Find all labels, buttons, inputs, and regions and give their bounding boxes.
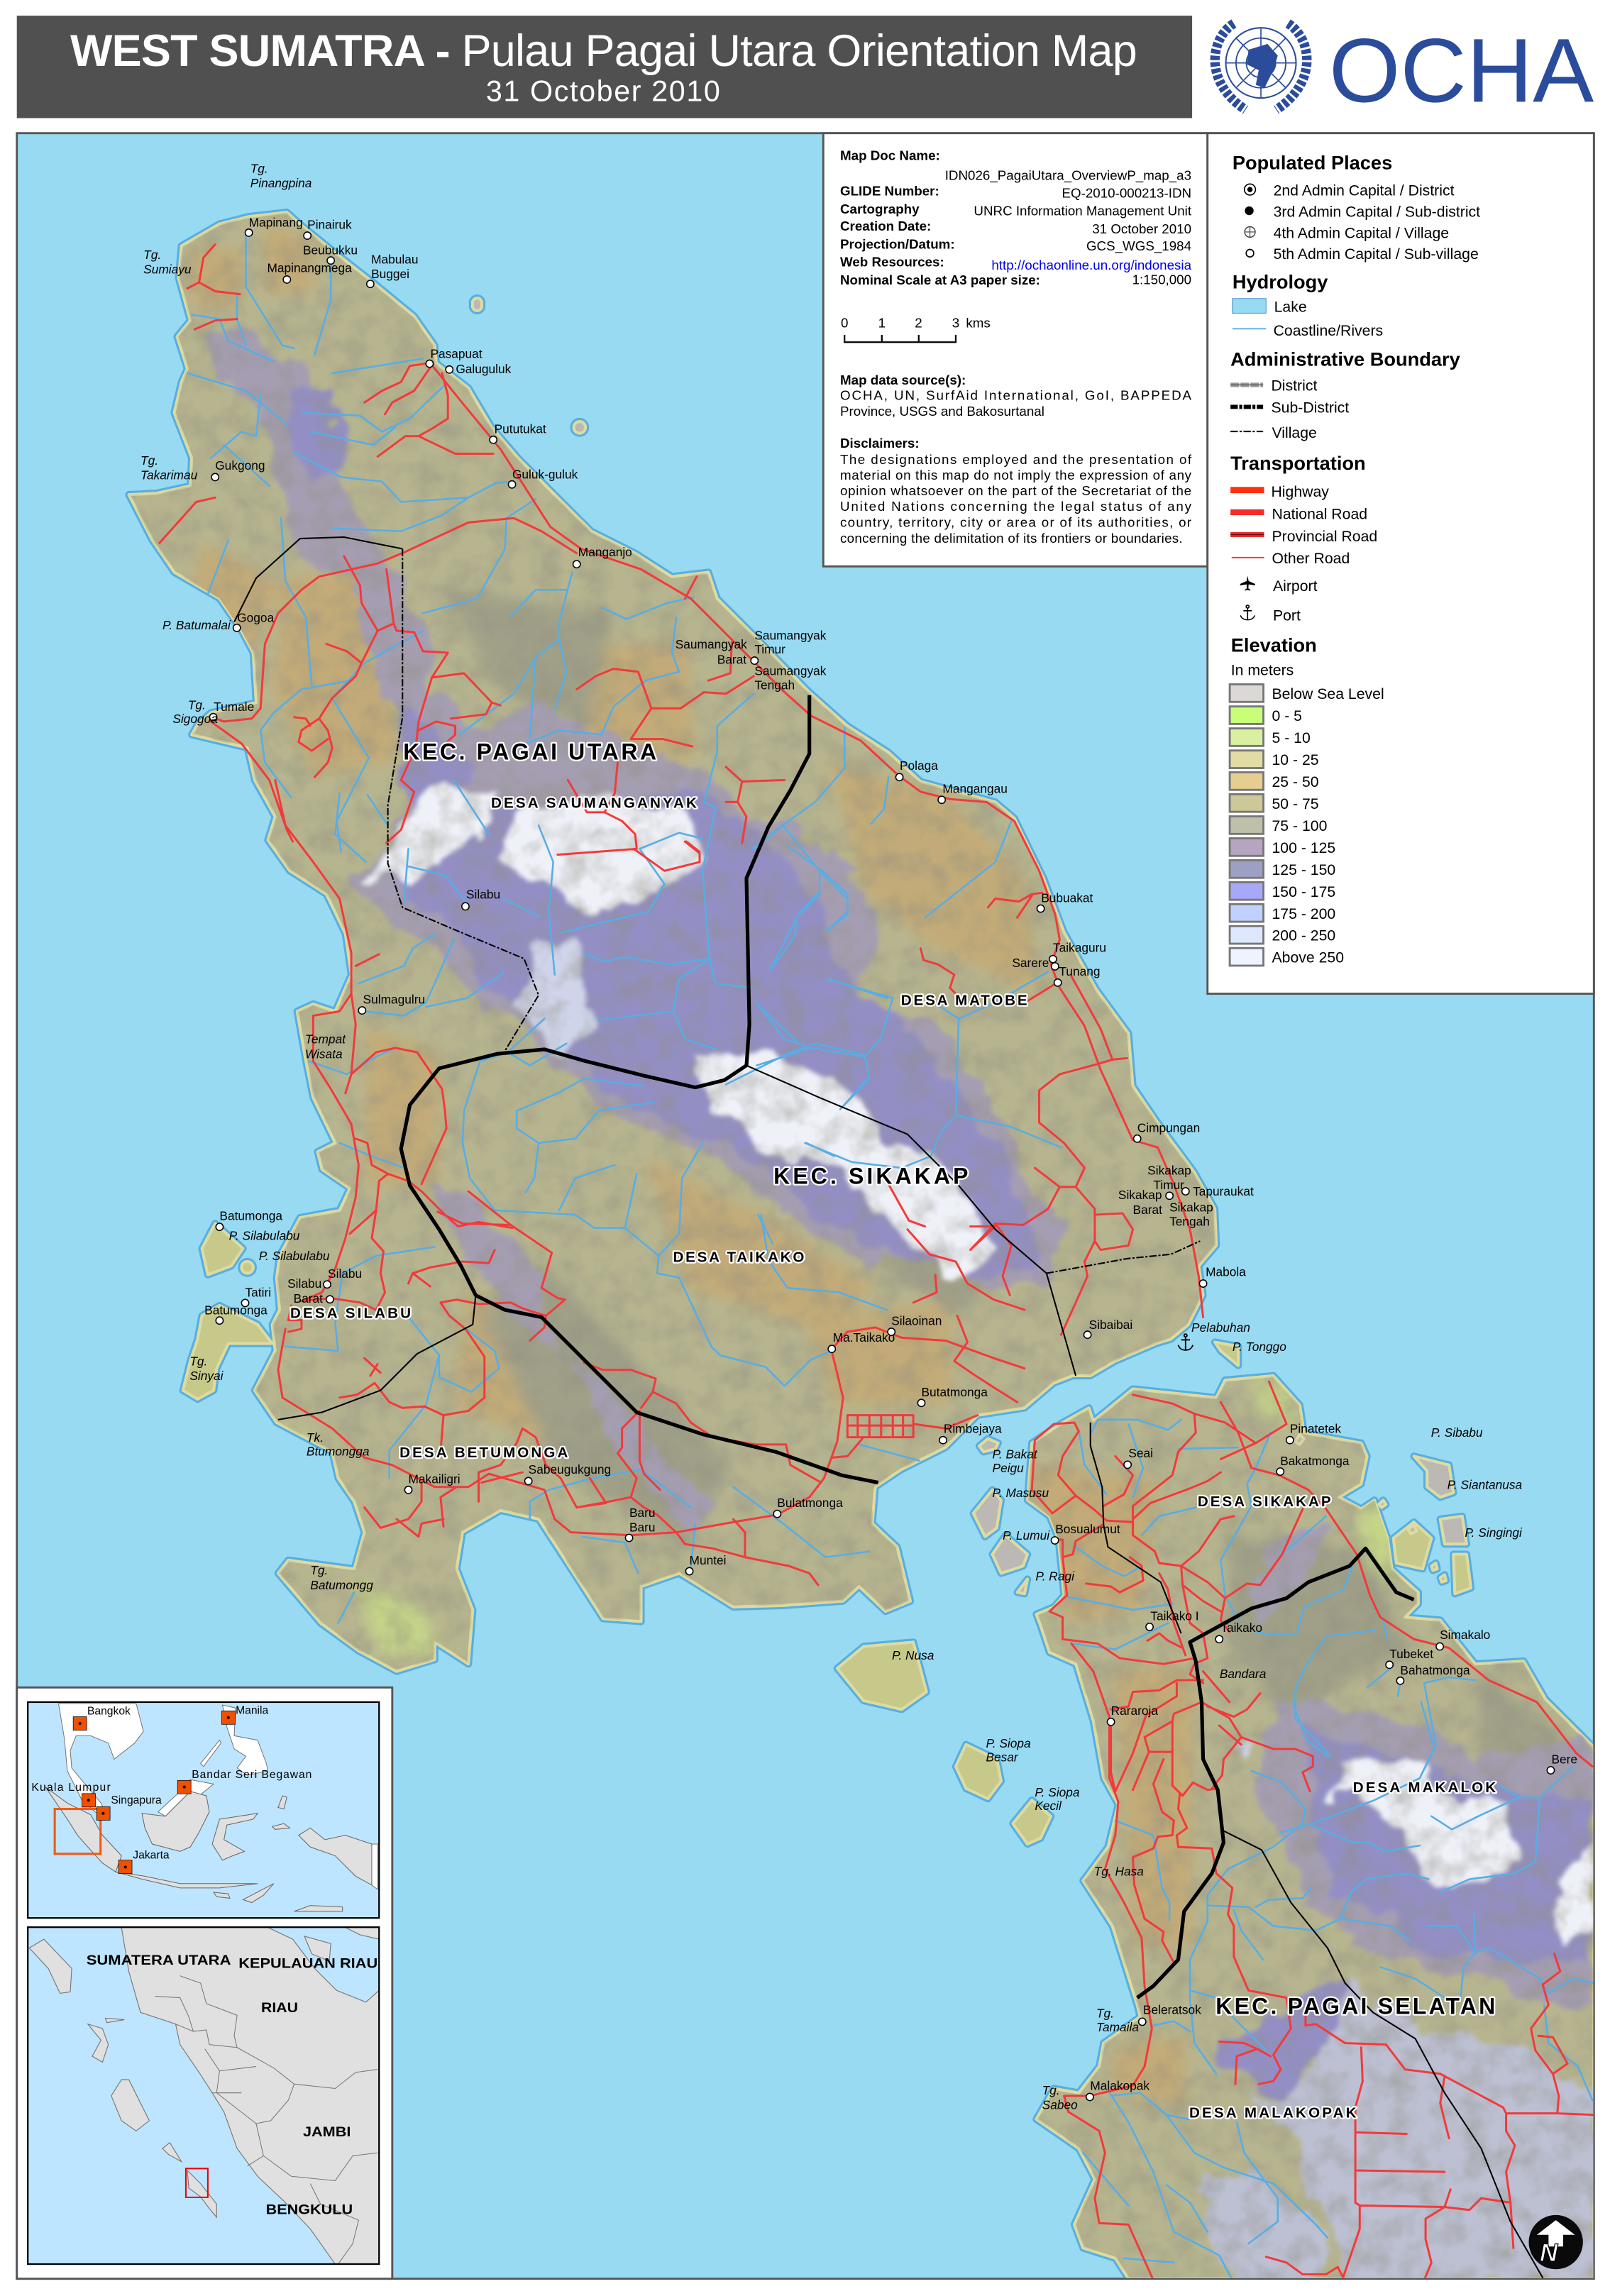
legend: elevation: 0 - 5	[1272, 707, 1302, 724]
place names: north	[140, 161, 827, 1061]
place names: southwest: Silabu	[328, 1266, 362, 1281]
map metadata: GCS_WGS_1984	[1086, 238, 1191, 254]
place names: south island: P. Ragi	[1035, 1569, 1075, 1584]
district and village headings: DESA MAKALOK	[1353, 1779, 1496, 1796]
place names: east coast: Sarere	[1012, 956, 1049, 970]
place names: east coast: Sikakap	[1118, 1188, 1162, 1202]
panel: legend	[1208, 133, 1594, 994]
place names: southwest: P. Silabulabu	[229, 1229, 300, 1243]
roads	[160, 244, 1594, 2280]
place names: southwest: P. Nusa	[892, 1648, 934, 1662]
disclaimers text: material on this map do not imply the expression of any	[840, 468, 1192, 482]
disclaimers text: country, territory, city or area or of its authorities, or	[840, 515, 1191, 530]
place names: north: Tg.	[143, 248, 161, 262]
place names: southwest: Sinyai	[189, 1369, 224, 1383]
place names: north: Pinangpina	[250, 176, 312, 190]
data sources text	[840, 372, 1192, 419]
icon: north arrow: N	[1540, 2239, 1558, 2267]
place names: south island: P. Lumui	[1003, 1528, 1050, 1542]
legend: elevation	[1230, 634, 1384, 966]
place names: east coast: Taikaguru	[1053, 940, 1106, 954]
scale bar: kms	[966, 316, 991, 331]
place names: south island: Tg.	[1042, 2083, 1060, 2097]
place names: north: Mapinangmega	[267, 261, 352, 275]
legend: hydrology	[1233, 270, 1383, 339]
legend: transportation: National Road	[1272, 506, 1367, 523]
district and village headings: DESA TAIKAKO	[673, 1249, 804, 1266]
place names: north: Sigogoa	[172, 712, 218, 726]
district and village headings: KEC. PAGAI UTARA	[403, 739, 656, 765]
place names: east coast: Tunang	[1059, 964, 1100, 978]
legend: transportation: Other Road	[1272, 550, 1350, 567]
place names: south island: Tg.	[1096, 2006, 1114, 2020]
district and village headings: DESA MATOBE	[901, 992, 1027, 1008]
legend: transportation: Airport	[1273, 578, 1318, 595]
map metadata: Nominal Scale at A3 paper size:	[840, 272, 1040, 287]
icon: UN emblem	[1215, 23, 1307, 110]
district and village headings: DESA BETUMONGA	[399, 1445, 568, 1461]
place names: south island: P. Siopa	[1035, 1785, 1080, 1799]
place names: southwest: Makailigri	[409, 1472, 461, 1486]
legend: transportation: Transportation	[1230, 452, 1366, 474]
place names: east coast: Polaga	[900, 758, 938, 773]
place names: south island: Tamaila	[1096, 2020, 1139, 2034]
legend: administrative boundary: Village	[1272, 424, 1317, 441]
place names: south island: Besar	[986, 1750, 1019, 1765]
place names: north: Saumangyak	[676, 637, 747, 651]
legend: populated places: Populated Places	[1233, 152, 1392, 174]
place names: north: Tg.	[140, 453, 158, 468]
place names: east coast: Cimpungan	[1137, 1121, 1200, 1135]
disclaimers text: United Nations concerning the legal status of any	[840, 499, 1192, 514]
map metadata: 31 October 2010	[1092, 221, 1191, 236]
legend: elevation: 125 - 150	[1272, 861, 1335, 878]
OCHA wordmark: OCHA	[1329, 20, 1594, 121]
place names: north: Galuguluk	[456, 362, 512, 376]
legend: elevation: 50 - 75	[1272, 795, 1319, 812]
map metadata: Creation Date:	[840, 219, 931, 233]
place names: east coast: Bubuakat	[1041, 890, 1093, 905]
legend: transportation	[1230, 452, 1377, 624]
place names: north: Wisata	[305, 1047, 343, 1061]
place names: east coast: Tengah	[1169, 1215, 1210, 1229]
data sources text: OCHA, UN, SurfAid International, GoI, BAPPEDA	[840, 388, 1192, 403]
map metadata: UNRC Information Management Unit	[974, 204, 1192, 219]
place names: north: Tumale	[214, 700, 254, 714]
inset: West Sumatra province: KEPULAUAN RIAU	[238, 1956, 377, 1972]
data sources text: Province, USGS and Bakosurtanal	[840, 404, 1044, 419]
legend: hydrology: Hydrology	[1233, 270, 1328, 292]
place names: south island: P. Masusu	[993, 1486, 1049, 1500]
legend: elevation: 25 - 50	[1272, 773, 1319, 790]
legend: transportation: Provincial Road	[1272, 528, 1377, 545]
place names: north: Mabulau	[371, 252, 419, 266]
map metadata: Projection/Datum:	[840, 237, 955, 252]
place names: east coast: Silaoinan	[891, 1314, 942, 1328]
place names: north: Pinairuk	[307, 218, 352, 232]
place names: south island: Rararoja	[1111, 1704, 1158, 1718]
place names: east coast: P. Tonggo	[1233, 1340, 1286, 1354]
place names: southwest: Bulatmonga	[777, 1496, 843, 1510]
legend: elevation: In meters	[1231, 661, 1294, 678]
panel: location insets	[17, 1687, 392, 2279]
scale bar: 3	[952, 316, 959, 331]
disclaimers text: concerning the delimitation of its frontiers or boundaries.	[840, 531, 1183, 546]
place names: east coast	[833, 758, 1286, 1435]
place names: southwest: Muntei	[690, 1553, 727, 1567]
place names: south island: Peigu	[993, 1461, 1024, 1475]
legend: administrative boundary: Sub-District	[1271, 399, 1349, 416]
place names: south island: Bere	[1551, 1753, 1577, 1767]
legend: elevation: Elevation	[1231, 634, 1317, 656]
place names: east coast: Sikakap	[1169, 1201, 1213, 1215]
place names: southwest: Sabeugukgung	[529, 1462, 611, 1477]
place names: south island: P. Bakat	[993, 1447, 1038, 1461]
place names: east coast: Timur	[1153, 1178, 1184, 1192]
legend: elevation: Above 250	[1272, 949, 1344, 966]
disclaimers text: opinion whatsoever on the part of the Secretariat of the	[840, 483, 1191, 498]
place names: north: Manganjo	[578, 545, 632, 559]
district and village headings: KEC. PAGAI SELATAN	[1215, 1993, 1495, 2019]
map metadata: EQ-2010-000213-IDN	[1062, 185, 1191, 200]
place names: south island: Taikako I	[1150, 1608, 1199, 1623]
place names: south island: Pinatetek	[1290, 1421, 1341, 1435]
legend: populated places	[1233, 152, 1480, 263]
place names: north: Silabu	[466, 888, 500, 902]
place names: north: Sulmagulru	[363, 992, 425, 1006]
map metadata: IDN026_PagaiUtara_OverviewP_map_a3	[945, 168, 1191, 184]
legend: elevation: 5 - 10	[1272, 729, 1311, 746]
place names: southwest: Baru	[629, 1506, 656, 1520]
place names: north: Tg.	[250, 161, 268, 175]
place names: south island: Bakatmonga	[1280, 1454, 1350, 1468]
legend: administrative boundary: Administrative Boundary	[1230, 348, 1460, 370]
date: 31 October 2010	[486, 74, 720, 107]
place names: south island: Beleratsok	[1143, 2002, 1201, 2016]
scale bar: 2	[915, 316, 922, 331]
legend: populated places: 5th Admin Capital / Sub-village	[1274, 245, 1479, 263]
map metadata: Map Doc Name:	[840, 148, 940, 162]
legend: elevation: 10 - 25	[1272, 751, 1319, 768]
place names: north: P. Batumalai	[162, 618, 231, 632]
legend: elevation: 200 - 250	[1272, 927, 1335, 944]
place names: south island: Bandara	[1220, 1667, 1267, 1681]
disclaimers text: The designations employed and the presentation of	[840, 452, 1192, 467]
place names: north: Sumiayu	[143, 263, 192, 277]
place names: southwest: P. Silabulabu	[259, 1249, 330, 1263]
legend: elevation: 100 - 125	[1272, 839, 1335, 856]
inset: Southeast Asia: Bangkok	[87, 1706, 131, 1718]
place names: east coast: Mangangau	[942, 782, 1008, 796]
legend: administrative boundary	[1230, 348, 1460, 441]
scale bar	[841, 316, 991, 342]
district and village headings: DESA SILABU	[290, 1305, 411, 1321]
map metadata: Cartography	[840, 202, 920, 216]
place names: south island: Kecil	[1035, 1799, 1062, 1813]
place names: south island: Tubeket	[1389, 1647, 1433, 1661]
title: WEST SUMATRA - Pulau Pagai Utara Orientation Map	[70, 26, 1137, 76]
place names: east coast: Barat	[1133, 1203, 1162, 1217]
legend: populated places: 4th Admin Capital / Village	[1274, 225, 1449, 242]
place names: southwest: Barat	[294, 1291, 323, 1306]
legend: elevation: Below Sea Level	[1272, 685, 1384, 702]
place names: southwest: Silabu	[287, 1276, 321, 1291]
place names: southwest: Tg.	[310, 1563, 328, 1577]
place names: north: Mapinang	[249, 216, 303, 230]
place names: north: Saumangyak	[754, 628, 827, 642]
place names: southwest	[189, 1209, 934, 1662]
place names: south island: Bosualumut	[1055, 1522, 1120, 1536]
legend: transportation: Port	[1273, 607, 1301, 624]
disclaimers text	[840, 436, 1192, 546]
legend: elevation: 75 - 100	[1272, 817, 1327, 834]
data sources text: Map data source(s):	[840, 372, 966, 387]
place names: east coast: Rimbejaya	[944, 1421, 1002, 1435]
place names: north: Tg.	[188, 697, 206, 712]
place names: north: Pututukat	[495, 422, 546, 436]
legend: elevation: 150 - 175	[1272, 883, 1335, 900]
place names: southwest: Tatiri	[246, 1286, 271, 1300]
map metadata: http://ochaonline.un.org/indonesia	[991, 258, 1192, 272]
map metadata	[840, 148, 1192, 287]
legend: hydrology: Lake	[1274, 298, 1307, 315]
place names: southwest: Tg.	[189, 1354, 207, 1369]
place names: south island: Bahatmonga	[1400, 1663, 1470, 1677]
village boundaries	[234, 537, 1544, 2280]
place names: south island: Sabeo	[1042, 2097, 1078, 2112]
place names: southwest: Baru	[629, 1520, 656, 1534]
scale bar: 0	[841, 316, 848, 331]
inset: West Sumatra province: JAMBI	[303, 2124, 351, 2140]
place names: south island: P. Sibabu	[1431, 1425, 1483, 1440]
map metadata: 1:150,000	[1132, 272, 1191, 287]
place names: north: Guluk-guluk	[512, 468, 578, 482]
place names: southwest: Tk.	[307, 1430, 324, 1445]
place names: east coast: Mabola	[1206, 1265, 1246, 1279]
place names: south island: P. Singingi	[1465, 1525, 1523, 1540]
inset: Southeast Asia: Jakarta	[133, 1850, 170, 1862]
place names: southwest: Btumongga	[307, 1444, 370, 1458]
district and village headings	[290, 739, 1496, 2121]
inset: West Sumatra province: RIAU	[261, 2000, 298, 2016]
sub-district boundaries	[401, 695, 1414, 1998]
inset: Southeast Asia	[28, 1702, 379, 1918]
place names: north: Timur	[754, 642, 785, 656]
legend: hydrology: Coastline/Rivers	[1274, 322, 1383, 339]
district and village headings: DESA SIKAKAP	[1198, 1494, 1331, 1510]
place names: east coast: Sibaibai	[1089, 1318, 1132, 1332]
icon: north arrow	[1529, 2215, 1583, 2269]
panel: map information	[823, 133, 1208, 566]
place names: north: Barat	[717, 652, 746, 666]
district and village headings: DESA SAUMANGANYAK	[491, 795, 697, 812]
disclaimers text: Disclaimers:	[840, 436, 920, 451]
icon: airport	[1240, 576, 1255, 591]
icon: port anchor	[1178, 1334, 1193, 1350]
place names: south island: Tg. Hasa	[1094, 1865, 1144, 1879]
place names: south island: Seai	[1128, 1446, 1153, 1460]
place names: east coast: Ma.Taikako	[833, 1330, 895, 1345]
inset: Southeast Asia: Kuala Lumpur	[31, 1782, 111, 1794]
place names: north: Buggei	[371, 267, 409, 281]
place names: south island: Simakalo	[1440, 1628, 1490, 1642]
place names: south island: Malakopak	[1090, 2079, 1149, 2093]
inset: Southeast Asia: Bandar Seri Begawan	[192, 1769, 311, 1781]
place names: south island: P. Siopa	[986, 1736, 1031, 1750]
map metadata: GLIDE Number:	[840, 184, 939, 199]
legend: elevation: 175 - 200	[1272, 905, 1335, 922]
place names: southwest: Batumonga	[219, 1209, 282, 1223]
place names: south island: Taikako	[1220, 1621, 1262, 1635]
place names: north: Tengah	[754, 678, 795, 692]
place names: north: Saumangyak	[754, 664, 827, 678]
place names: east coast: Tapuraukat	[1193, 1184, 1254, 1198]
place names: north: Takarimau	[140, 468, 198, 482]
inset: West Sumatra province	[28, 1927, 379, 2264]
place names: north: Beubukku	[303, 243, 358, 257]
place names: north: Gogoa	[237, 611, 275, 625]
legend: populated places: 3rd Admin Capital / Sub-district	[1274, 203, 1480, 220]
place names: east coast: Sikakap	[1147, 1163, 1191, 1177]
scale bar: 1	[878, 316, 886, 331]
place names: north: Gukgong	[215, 458, 265, 473]
district and village headings: KEC. SIKAKAP	[773, 1164, 968, 1189]
page title banner	[17, 16, 1192, 118]
icon: port	[1240, 605, 1255, 620]
place names: south island	[986, 1421, 1577, 2112]
legend: administrative boundary: District	[1271, 377, 1317, 394]
place names: southwest: Batumonga	[204, 1303, 268, 1317]
inset: Southeast Asia: Manila	[236, 1704, 269, 1716]
rivers	[187, 233, 1594, 2280]
legend: transportation: Highway	[1271, 483, 1329, 500]
settlement markers	[209, 229, 1555, 2101]
place names: east coast: Butatmonga	[921, 1385, 988, 1399]
inset: Southeast Asia: Singapura	[111, 1794, 162, 1806]
district and village headings: DESA MALAKOPAK	[1189, 2104, 1357, 2121]
place names: north: Tempat	[305, 1032, 346, 1047]
place names: southwest: Batumongg	[310, 1578, 373, 1592]
place names: south island: P. Siantanusa	[1448, 1478, 1523, 1492]
legend: populated places: 2nd Admin Capital / District	[1274, 182, 1455, 199]
place names: north: Pasapuat	[430, 346, 483, 360]
map metadata: Web Resources:	[840, 254, 944, 269]
place names: east coast: Pelabuhan	[1191, 1320, 1250, 1335]
inset: West Sumatra province: SUMATERA UTARA	[87, 1953, 231, 1968]
inset: West Sumatra province: BENGKULU	[266, 2202, 353, 2218]
